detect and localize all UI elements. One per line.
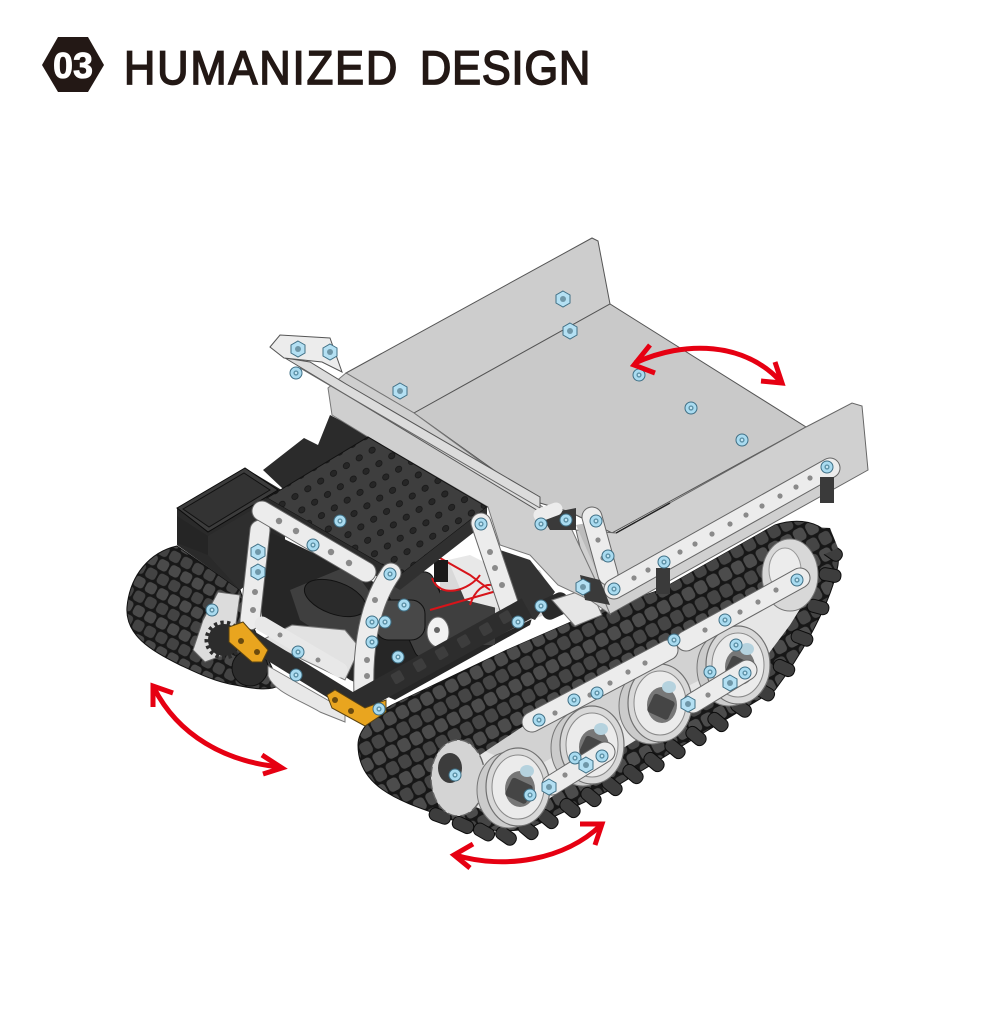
heading: DESIGN xyxy=(420,41,590,94)
road wheels xyxy=(477,748,550,828)
arrow: left track swing xyxy=(153,686,282,774)
illustration: tracked dump truck xyxy=(127,238,868,848)
dump bed xyxy=(270,238,868,614)
right diagonal upright xyxy=(481,523,512,615)
blue nuts and bolts xyxy=(251,291,833,801)
perforated control plate xyxy=(267,437,487,590)
rear idler wheel xyxy=(762,539,818,611)
sprocket xyxy=(431,740,485,816)
top front strip xyxy=(262,511,366,572)
heading xyxy=(124,41,590,94)
left wall xyxy=(328,373,610,614)
right main track belt xyxy=(358,521,845,848)
long side beam xyxy=(285,358,540,512)
orange bracket right xyxy=(327,690,386,726)
arrow: bed tilt xyxy=(634,345,782,383)
black control box and battery xyxy=(177,415,372,590)
curved centre upright xyxy=(364,573,391,695)
chassis frame interior xyxy=(255,525,602,700)
bed hinge blob xyxy=(541,508,576,530)
dark left crossbar xyxy=(238,632,352,702)
orange bracket left xyxy=(229,622,268,662)
red wires xyxy=(430,558,532,610)
arrow: right track swing xyxy=(454,824,602,868)
tread lugs along lower edge xyxy=(427,540,845,848)
inner chassis gap behind wheels xyxy=(440,562,818,812)
white lower strip xyxy=(262,624,340,670)
dark lower strip xyxy=(352,608,527,705)
right wall xyxy=(576,403,868,614)
top tread surface xyxy=(365,525,838,800)
rear wall xyxy=(346,238,610,413)
skid plate xyxy=(268,666,345,722)
drive gear xyxy=(208,624,240,656)
icon: hexagon number badge xyxy=(42,37,104,92)
dark machinery near bracket xyxy=(500,550,555,620)
hinge bracket xyxy=(270,335,342,372)
title block xyxy=(42,37,590,94)
icon: hexagon number badge: 03 xyxy=(53,45,93,86)
white frame strips and uprights xyxy=(229,511,527,726)
suspension strips xyxy=(532,650,668,722)
heading: HUMANIZED xyxy=(124,41,397,94)
front bed bracket strip xyxy=(614,468,830,589)
wheels and sprocket xyxy=(431,539,818,828)
hatched bed hinge strip xyxy=(576,522,610,575)
bed floor xyxy=(414,304,806,533)
left upright xyxy=(250,530,260,620)
left rear track xyxy=(127,546,280,689)
